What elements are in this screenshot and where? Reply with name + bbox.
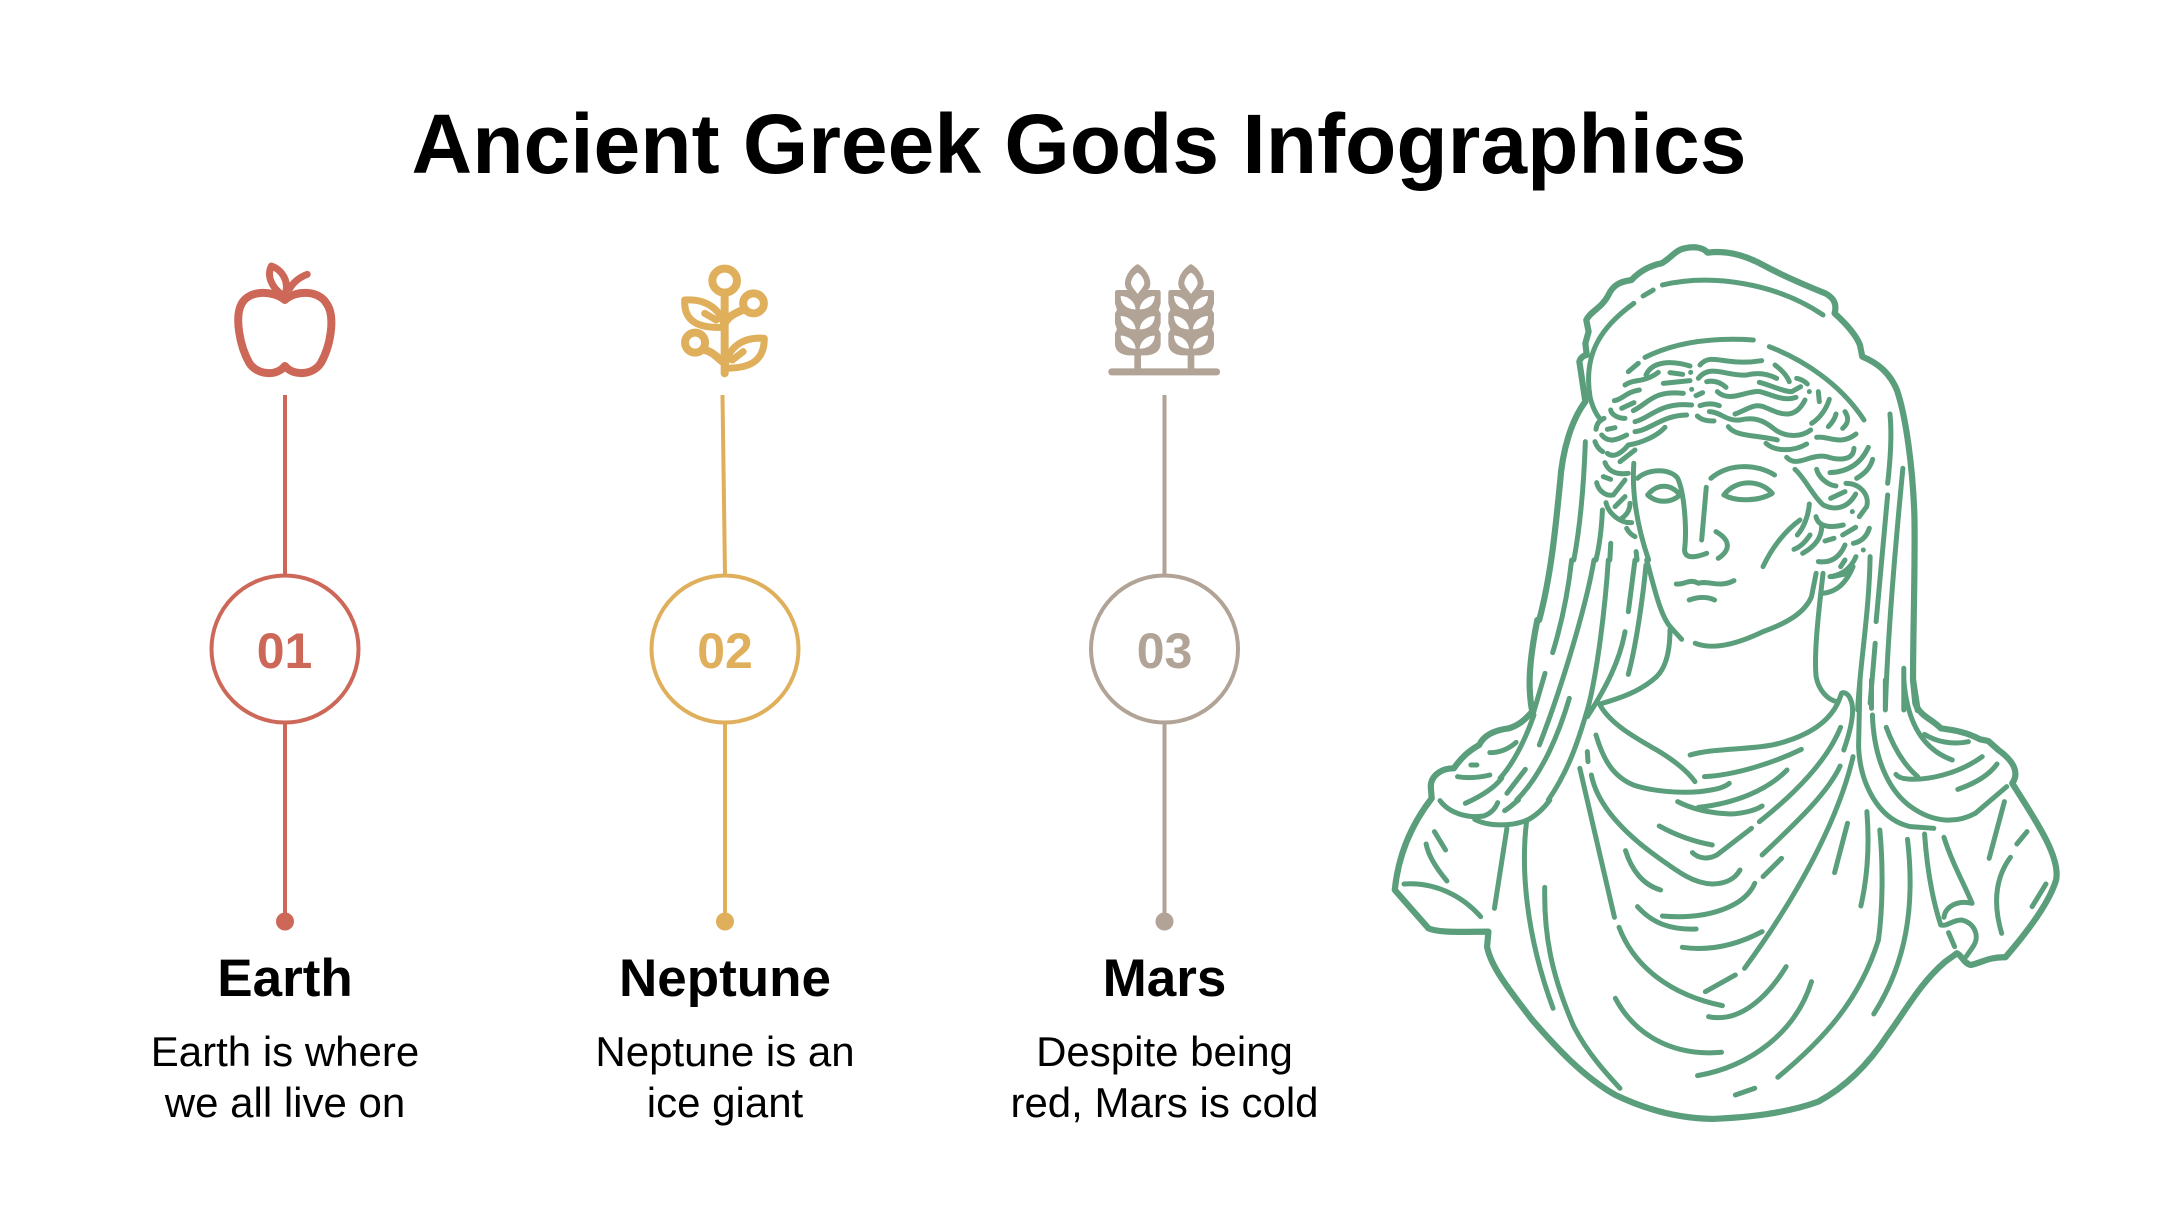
panel: Earth column (151, 266, 419, 1126)
description: Neptune: Neptune is an (595, 1028, 855, 1075)
icon: flowering plant (685, 269, 764, 373)
statue hair: right side (1696, 347, 1873, 577)
heading: Mars: Mars (1103, 949, 1226, 1008)
statue hair: left side (1595, 339, 1753, 537)
description: Earth: we all live on (164, 1079, 405, 1126)
end dot (276, 912, 294, 930)
panel: Neptune column (595, 269, 855, 1126)
description: Mars: Despite being (1036, 1028, 1293, 1075)
connector line: Earth (283, 395, 287, 921)
icon: apple (238, 266, 331, 373)
icon: wheat (1108, 264, 1220, 375)
number circle 01 (212, 576, 358, 722)
panel: Mars column (1010, 264, 1319, 1126)
description: Mars: red, Mars is cold (1010, 1079, 1319, 1126)
end dot (1156, 912, 1174, 930)
connector line: Mars (1162, 395, 1166, 921)
number circle 02: 02 (697, 623, 753, 679)
heading: Earth: Earth (217, 949, 353, 1008)
end dot (716, 912, 734, 930)
description: Earth: Earth is where (151, 1028, 419, 1075)
title: Ancient Greek Gods Infographics (412, 97, 1746, 191)
statue shoulders and drapery (1395, 680, 2057, 1119)
connector line: Neptune (722, 395, 725, 921)
illustration: Greek goddess bust (1395, 247, 2057, 1119)
statue head and veil (1539, 247, 1918, 710)
statue veil folds and neck (1500, 560, 1729, 800)
number circle 03: 03 (1137, 623, 1192, 679)
number circle 02 (652, 576, 798, 722)
number circle 01: 01 (257, 623, 312, 679)
description: Neptune: ice giant (647, 1079, 804, 1126)
heading: Neptune: Neptune (619, 949, 831, 1008)
number circle 03 (1091, 576, 1238, 722)
